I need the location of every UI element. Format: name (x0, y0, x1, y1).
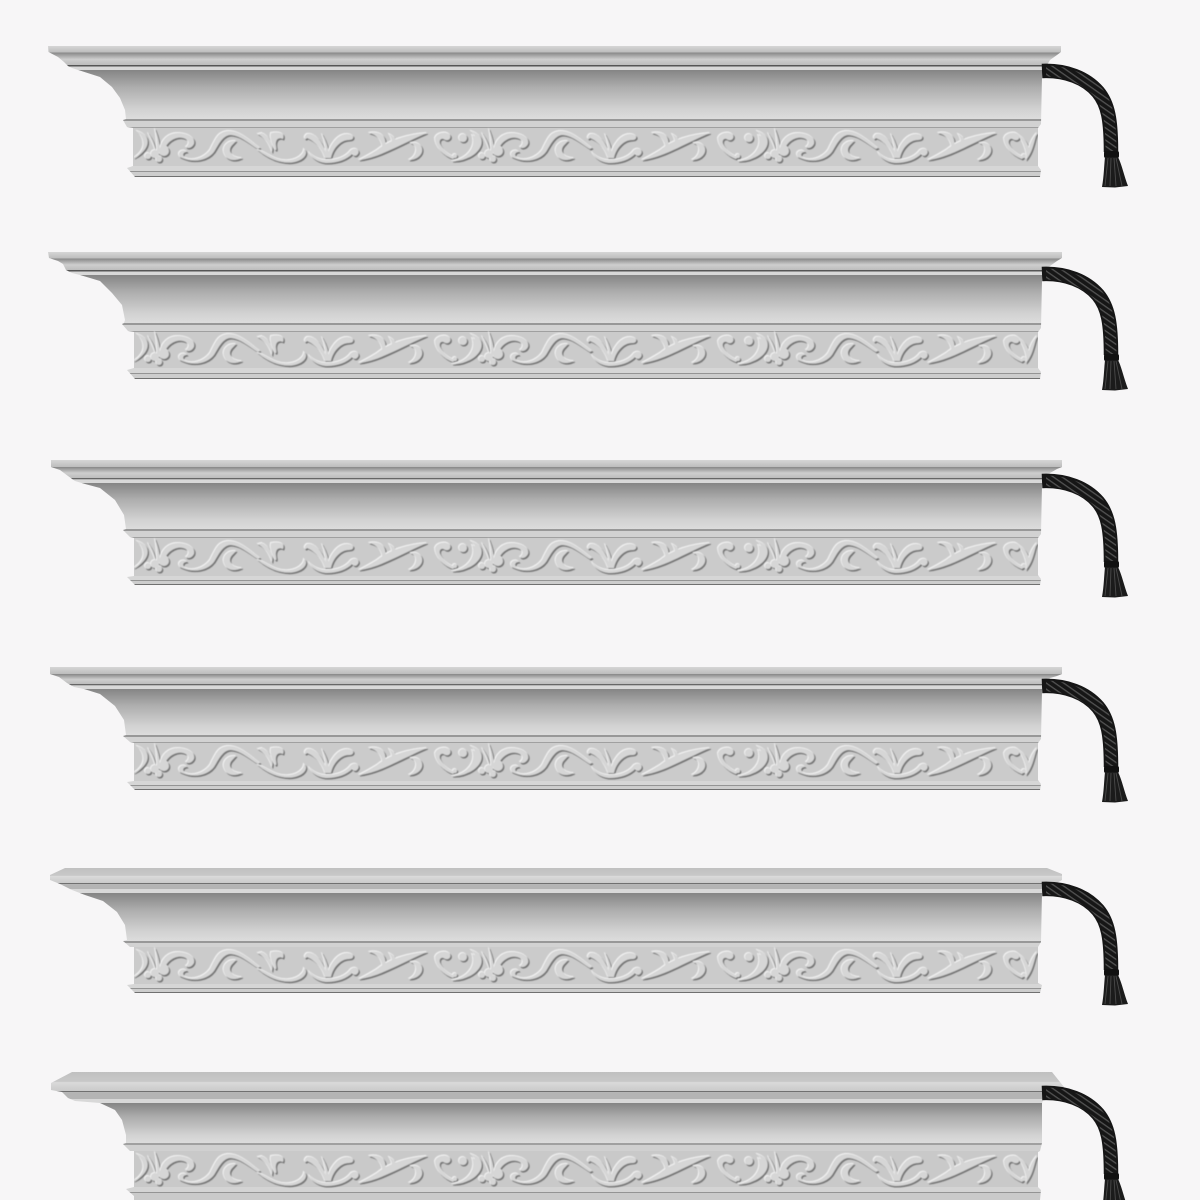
cornice 4 (40, 667, 1128, 802)
cornice 2 (40, 252, 1128, 390)
rope and tassel 1 (1042, 71, 1128, 188)
moulding body 6 (40, 1072, 1070, 1200)
cornice 3 (40, 460, 1128, 598)
cornice 6 (40, 1072, 1128, 1200)
cornice 1 (40, 46, 1128, 188)
moulding body 3 (40, 460, 1070, 585)
rope and tassel 4 (1042, 686, 1128, 802)
frieze ornament 3 (133, 538, 1038, 574)
rope and tassel 3 (1042, 481, 1128, 598)
frieze ornament 4 (133, 743, 1038, 779)
frieze ornament 1 (133, 128, 1038, 164)
moulding body 5 (40, 868, 1070, 993)
rope and tassel 2 (1042, 274, 1128, 390)
moulding body 2 (40, 252, 1070, 379)
rope and tassel 5 (1042, 889, 1128, 1006)
frieze ornament 2 (133, 331, 1038, 367)
rope and tassel 6 (1042, 1093, 1128, 1200)
moulding body 4 (40, 667, 1070, 790)
moulding body 1 (40, 46, 1070, 177)
frieze ornament 6 (133, 1151, 1038, 1187)
cornice 5 (40, 868, 1128, 1006)
frieze ornament 5 (133, 947, 1038, 983)
